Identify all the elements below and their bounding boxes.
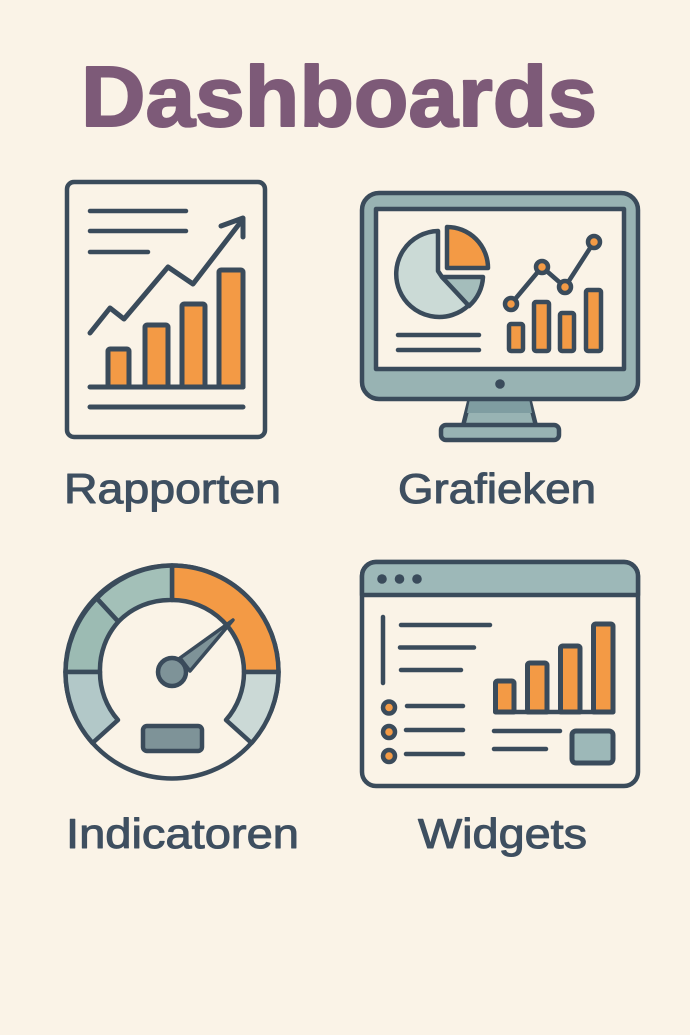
report baseline xyxy=(90,387,243,407)
label: Rapporten: Rapporten xyxy=(64,465,281,512)
label: Indicatoren: Indicatoren xyxy=(66,810,299,857)
window title bar xyxy=(362,562,638,595)
gauge readout xyxy=(143,726,202,751)
line chart xyxy=(505,236,600,310)
icon: gauge dial xyxy=(66,566,278,778)
gauge needle xyxy=(180,620,233,671)
icon: report page xyxy=(67,182,265,437)
panel: Rapporten xyxy=(67,182,265,437)
monitor body xyxy=(362,193,638,399)
gauge segments xyxy=(65,566,279,743)
label: Widgets: Widgets xyxy=(418,810,587,857)
pie chart xyxy=(396,227,488,317)
bar chart: report xyxy=(108,270,243,387)
pie caption lines xyxy=(398,335,479,350)
stand shadow xyxy=(467,401,532,413)
monitor base xyxy=(441,425,559,440)
icon: monitor stand xyxy=(463,398,536,426)
bar chart: window xyxy=(496,624,613,712)
window dots xyxy=(377,574,422,584)
panel: Widgets xyxy=(362,562,638,786)
bar chart: monitor xyxy=(509,290,601,351)
label: Grafieken: Grafieken xyxy=(398,465,596,512)
small widget tile xyxy=(572,731,613,763)
title: Dashboards xyxy=(81,50,597,145)
panel: Indicatoren xyxy=(65,566,279,778)
icon: app window xyxy=(362,562,638,786)
list bullets xyxy=(383,702,395,762)
panel: Grafieken xyxy=(362,193,638,440)
window text lines xyxy=(383,617,560,754)
gauge hub xyxy=(158,658,186,686)
arrow: upward trend xyxy=(90,218,243,333)
report text lines xyxy=(90,211,186,252)
monitor power dot xyxy=(495,379,505,389)
monitor screen xyxy=(376,209,624,369)
